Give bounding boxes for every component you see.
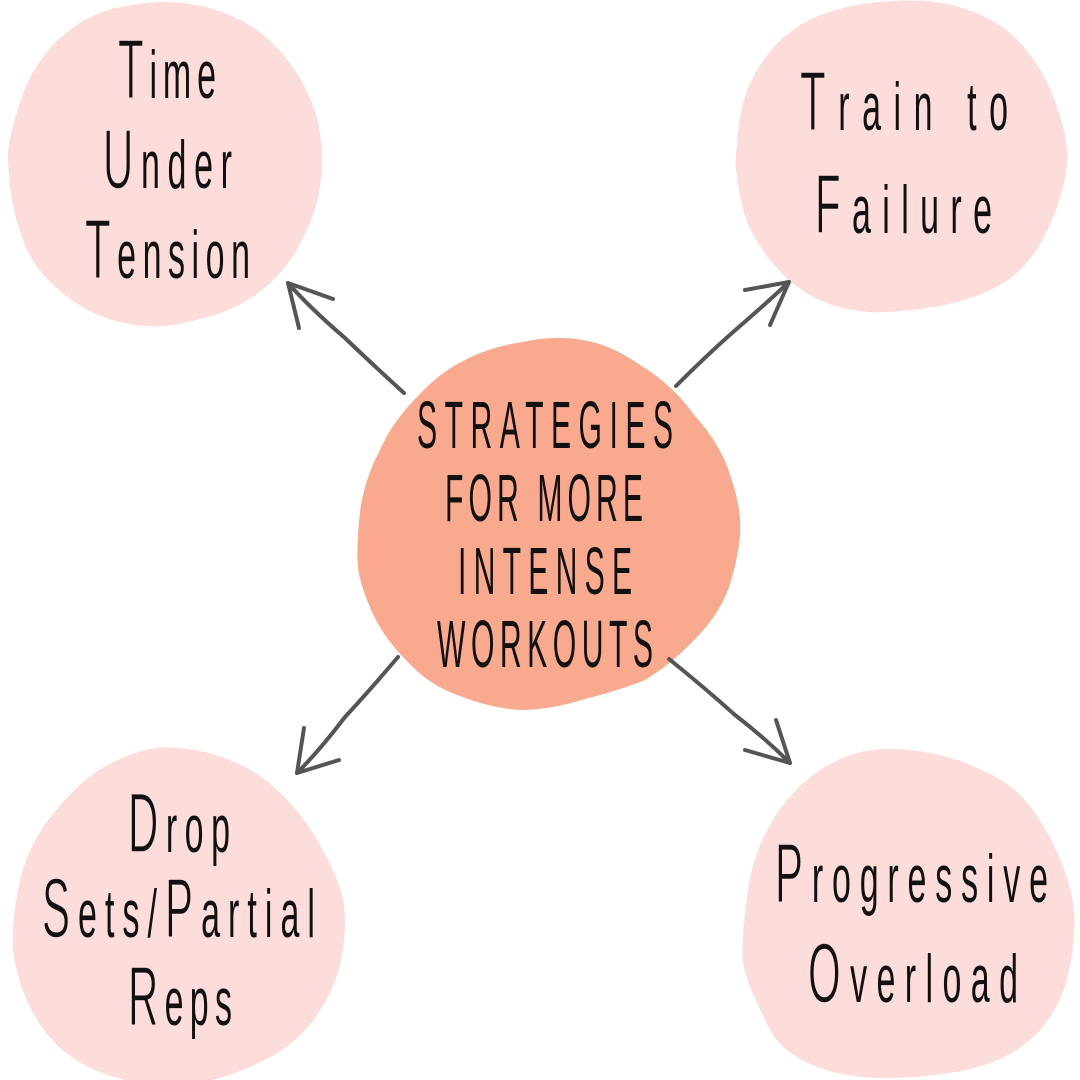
arrow: to drop sets [297,657,398,773]
panel: central topic: FOR MORE [445,462,643,536]
panel: drop sets and partial reps: Drop [128,777,230,871]
arrow: to progressive overload [669,659,790,763]
panel: drop sets and partial reps: Sets/Partial [42,862,315,956]
panel: central topic: STRATEGIES [417,389,673,463]
panel: progressive overload [742,749,1074,1078]
panel: central topic: WORKOUTS [437,608,653,682]
panel: time under tension: Under [103,113,232,207]
panel: time under tension: Tension [85,203,250,297]
panel: progressive overload: Progressive [775,827,1048,921]
panel: central topic: INTENSE [458,535,632,609]
panel: central topic [357,338,740,710]
panel: progressive overload: Overload [808,927,1018,1021]
panel: drop sets and partial reps [13,747,345,1080]
panel: time under tension: Time [118,23,216,117]
arrow: to train to failure [676,282,789,386]
panel: drop sets and partial reps: Reps [128,950,232,1044]
panel: time under tension [8,2,322,326]
panel: train to failure: Train to [800,55,1008,149]
panel: train to failure: Failure [815,158,992,252]
arrow: to time under tension [288,283,404,393]
panel: train to failure [736,0,1067,312]
